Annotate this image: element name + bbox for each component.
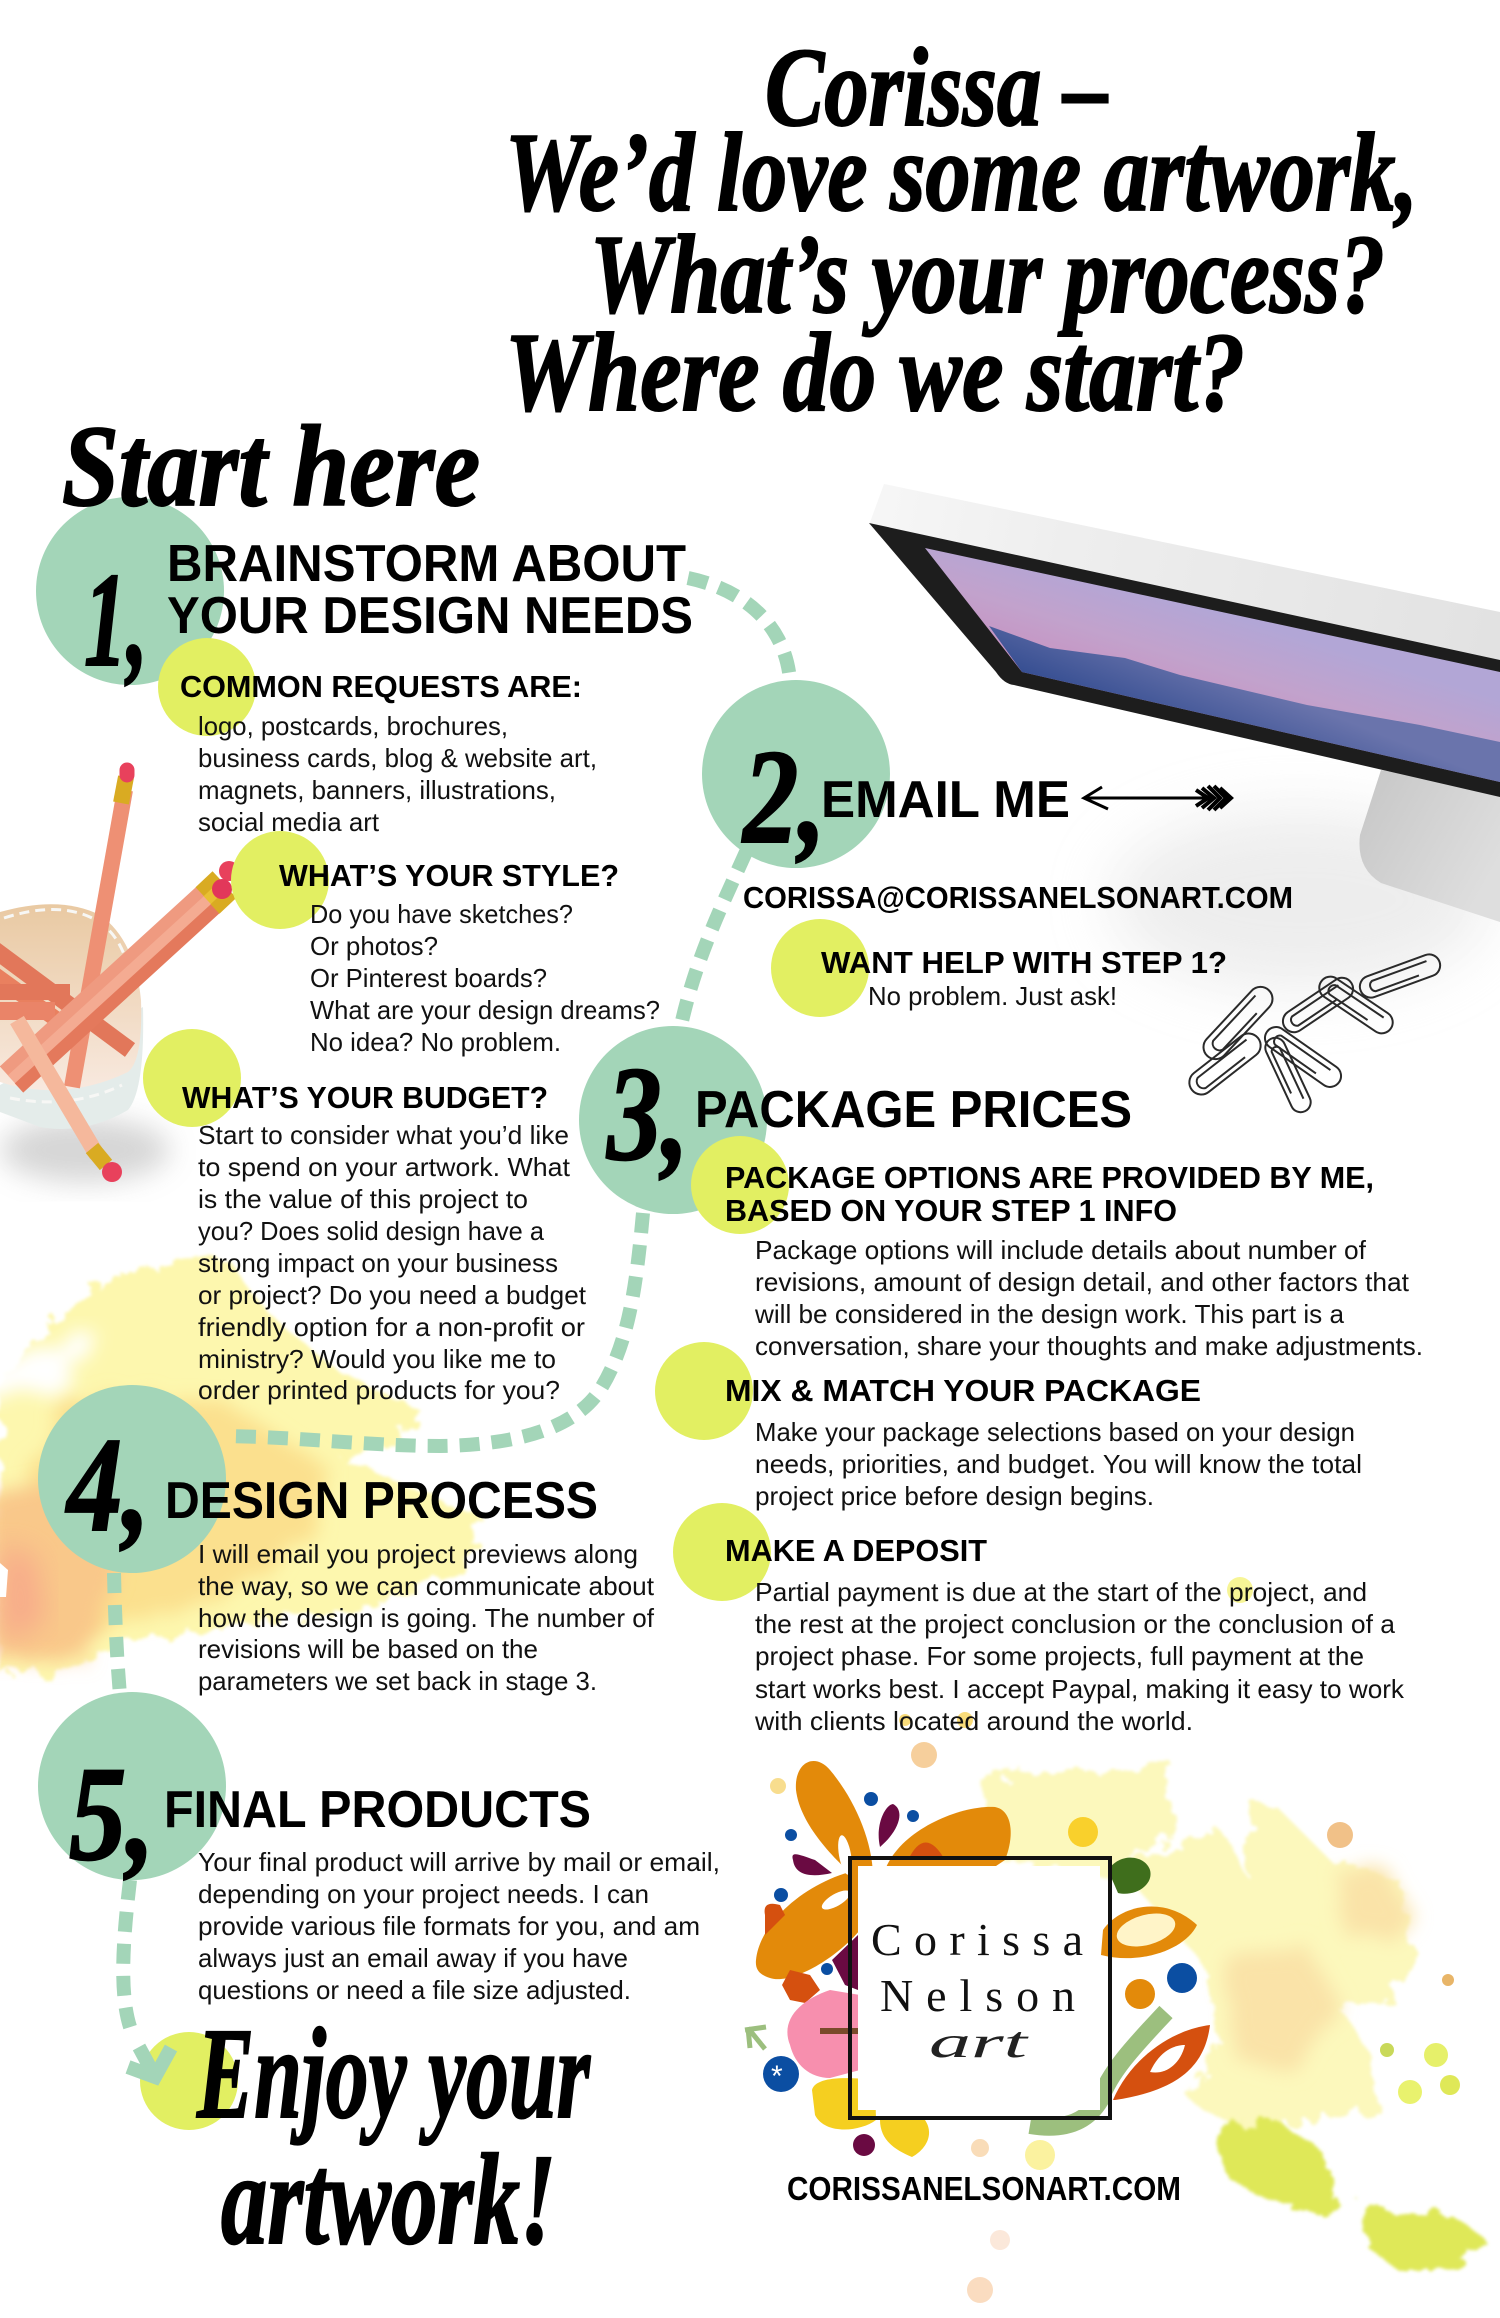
step 4 text: the way, so we can communicate about <box>198 1571 655 1601</box>
step 5 text <box>198 1847 720 2005</box>
common requests block: logo, postcards, brochures, <box>198 711 508 741</box>
step 4 text: revisions will be based on the <box>198 1634 538 1664</box>
logo: floral artwork <box>745 1761 1210 2157</box>
want help block: No problem. Just ask! <box>868 981 1117 1011</box>
step 4 text: how the design is going. The number of <box>198 1603 655 1633</box>
step 5 number: 5, <box>69 1740 155 1889</box>
step 1 heading: BRAINSTORM ABOUT <box>167 535 686 593</box>
what's your budget block: friendly option for a non-profit or <box>198 1312 585 1342</box>
what's your budget block <box>182 1080 587 1405</box>
make a deposit block: MAKE A DEPOSIT <box>725 1533 987 1568</box>
what's your style block: No idea? No problem. <box>310 1027 561 1057</box>
title <box>505 26 1418 435</box>
what's your style block: WHAT’S YOUR STYLE? <box>279 858 619 893</box>
what's your style block: Or Pinterest boards? <box>310 963 547 993</box>
common requests block: social media art <box>198 807 380 837</box>
heading: start here: Start here <box>62 403 480 531</box>
step 1 heading <box>167 535 693 645</box>
what's your budget block: ministry? Would you like me to <box>198 1344 556 1374</box>
common requests block: COMMON REQUESTS ARE: <box>180 669 582 704</box>
step circles <box>36 497 890 1880</box>
mix and match block: MIX & MATCH YOUR PACKAGE <box>725 1373 1201 1408</box>
what's your budget block: or project? Do you need a budget <box>198 1280 587 1310</box>
common requests block: magnets, banners, illustrations, <box>198 775 556 805</box>
what's your budget block: is the value of this project to <box>198 1184 528 1214</box>
title: Where do we start? <box>505 311 1245 435</box>
mix and match block <box>725 1373 1362 1511</box>
what's your budget block: you? Does solid design have a <box>198 1216 545 1246</box>
step 4 text: parameters we set back in stage 3. <box>198 1666 597 1696</box>
mix and match block: Make your package selections based on your design <box>755 1417 1355 1447</box>
what's your budget block: WHAT’S YOUR BUDGET? <box>182 1080 548 1115</box>
package options block <box>725 1160 1423 1361</box>
email address: CORISSA@CORISSANELSONART.COM <box>743 880 1293 915</box>
mix and match block: project price before design begins. <box>755 1481 1154 1511</box>
mix and match block: needs, priorities, and budget. You will know the total <box>755 1449 1362 1479</box>
common requests block: business cards, blog & website art, <box>198 743 597 773</box>
step 2 number: 2, <box>741 723 826 872</box>
what's your budget block: order printed products for you? <box>198 1375 560 1405</box>
closing script text <box>196 2002 591 2272</box>
step 5 text: depending on your project needs. I can <box>198 1879 649 1909</box>
want help block <box>821 945 1227 1011</box>
arrow head pointing at closing text <box>128 2047 171 2077</box>
make a deposit block: Partial payment is due at the start of the project, and <box>755 1577 1367 1607</box>
common requests block <box>180 669 597 837</box>
what's your style block: Do you have sketches? <box>310 899 573 929</box>
icon: pencils in a cup <box>0 770 252 1182</box>
logo: framed name: Nelson <box>880 1970 1075 2021</box>
watercolor splash: lower right <box>770 1577 1486 2303</box>
what's your style block <box>279 858 660 1057</box>
package options block: BASED ON YOUR STEP 1 INFO <box>725 1193 1177 1228</box>
icon: desktop monitor photo <box>869 484 1500 990</box>
step 4 text: I will email you project previews along <box>198 1539 638 1569</box>
package options block: PACKAGE OPTIONS ARE PROVIDED BY ME, <box>725 1160 1374 1195</box>
title: Corissa – <box>765 26 1108 150</box>
what's your budget block: Start to consider what you’d like <box>198 1120 569 1150</box>
closing script text: artwork! <box>221 2128 556 2272</box>
closing script text: Enjoy your <box>196 2002 591 2146</box>
what's your budget block: to spend on your artwork. What <box>198 1152 571 1182</box>
logo: framed name: art <box>929 2018 1030 2067</box>
step 3 heading: PACKAGE PRICES <box>695 1081 1132 1139</box>
make a deposit block: project phase. For some projects, full payment at the <box>755 1641 1364 1671</box>
step 5 heading: FINAL PRODUCTS <box>164 1781 591 1839</box>
what's your budget block: strong impact on your business <box>198 1248 558 1278</box>
package options block: Package options will include details about number of <box>755 1235 1367 1265</box>
step 1 number: 1, <box>84 546 148 695</box>
website address: CORISSANELSONART.COM <box>787 2170 1181 2207</box>
step 5 text: questions or need a file size adjusted. <box>198 1975 631 2005</box>
package options block: will be considered in the design work. This part is a <box>754 1299 1345 1329</box>
step 4 text <box>198 1539 655 1696</box>
logo: framed name <box>850 1858 1110 2118</box>
what's your style block: Or photos? <box>310 931 438 961</box>
logo: floral artwork: * <box>771 2060 783 2093</box>
package options block: conversation, share your thoughts and make adjustments. <box>755 1331 1423 1361</box>
step 4 number: 4, <box>65 1411 150 1560</box>
package options block: revisions, amount of design detail, and other factors that <box>755 1267 1410 1297</box>
step 4 heading: DESIGN PROCESS <box>165 1472 598 1530</box>
accent circles <box>140 638 869 2130</box>
logo: framed name: Corissa <box>871 1914 1083 1965</box>
step 3 number: 3, <box>605 1040 689 1189</box>
watercolor splash: left <box>0 1256 482 1675</box>
make a deposit block <box>725 1533 1405 1736</box>
make a deposit block: the rest at the project conclusion or the conclusion of a <box>755 1609 1396 1639</box>
step 5 text: provide various file formats for you, and am <box>198 1911 700 1941</box>
dashed path connecting the steps <box>114 578 790 2035</box>
make a deposit block: start works best. I accept Paypal, making it easy to work <box>755 1674 1405 1704</box>
step 1 heading: YOUR DESIGN NEEDS <box>167 587 693 645</box>
icon: paper clips <box>1185 951 1443 1115</box>
icon: arrow <box>1084 786 1231 810</box>
step 5 text: Your final product will arrive by mail or email, <box>198 1847 720 1877</box>
step 2 heading: EMAIL ME <box>821 771 1070 829</box>
step 5 text: always just an email away if you have <box>198 1943 628 1973</box>
want help block: WANT HELP WITH STEP 1? <box>821 945 1227 980</box>
make a deposit block: with clients located around the world. <box>754 1706 1193 1736</box>
what's your style block: What are your design dreams? <box>310 995 660 1025</box>
